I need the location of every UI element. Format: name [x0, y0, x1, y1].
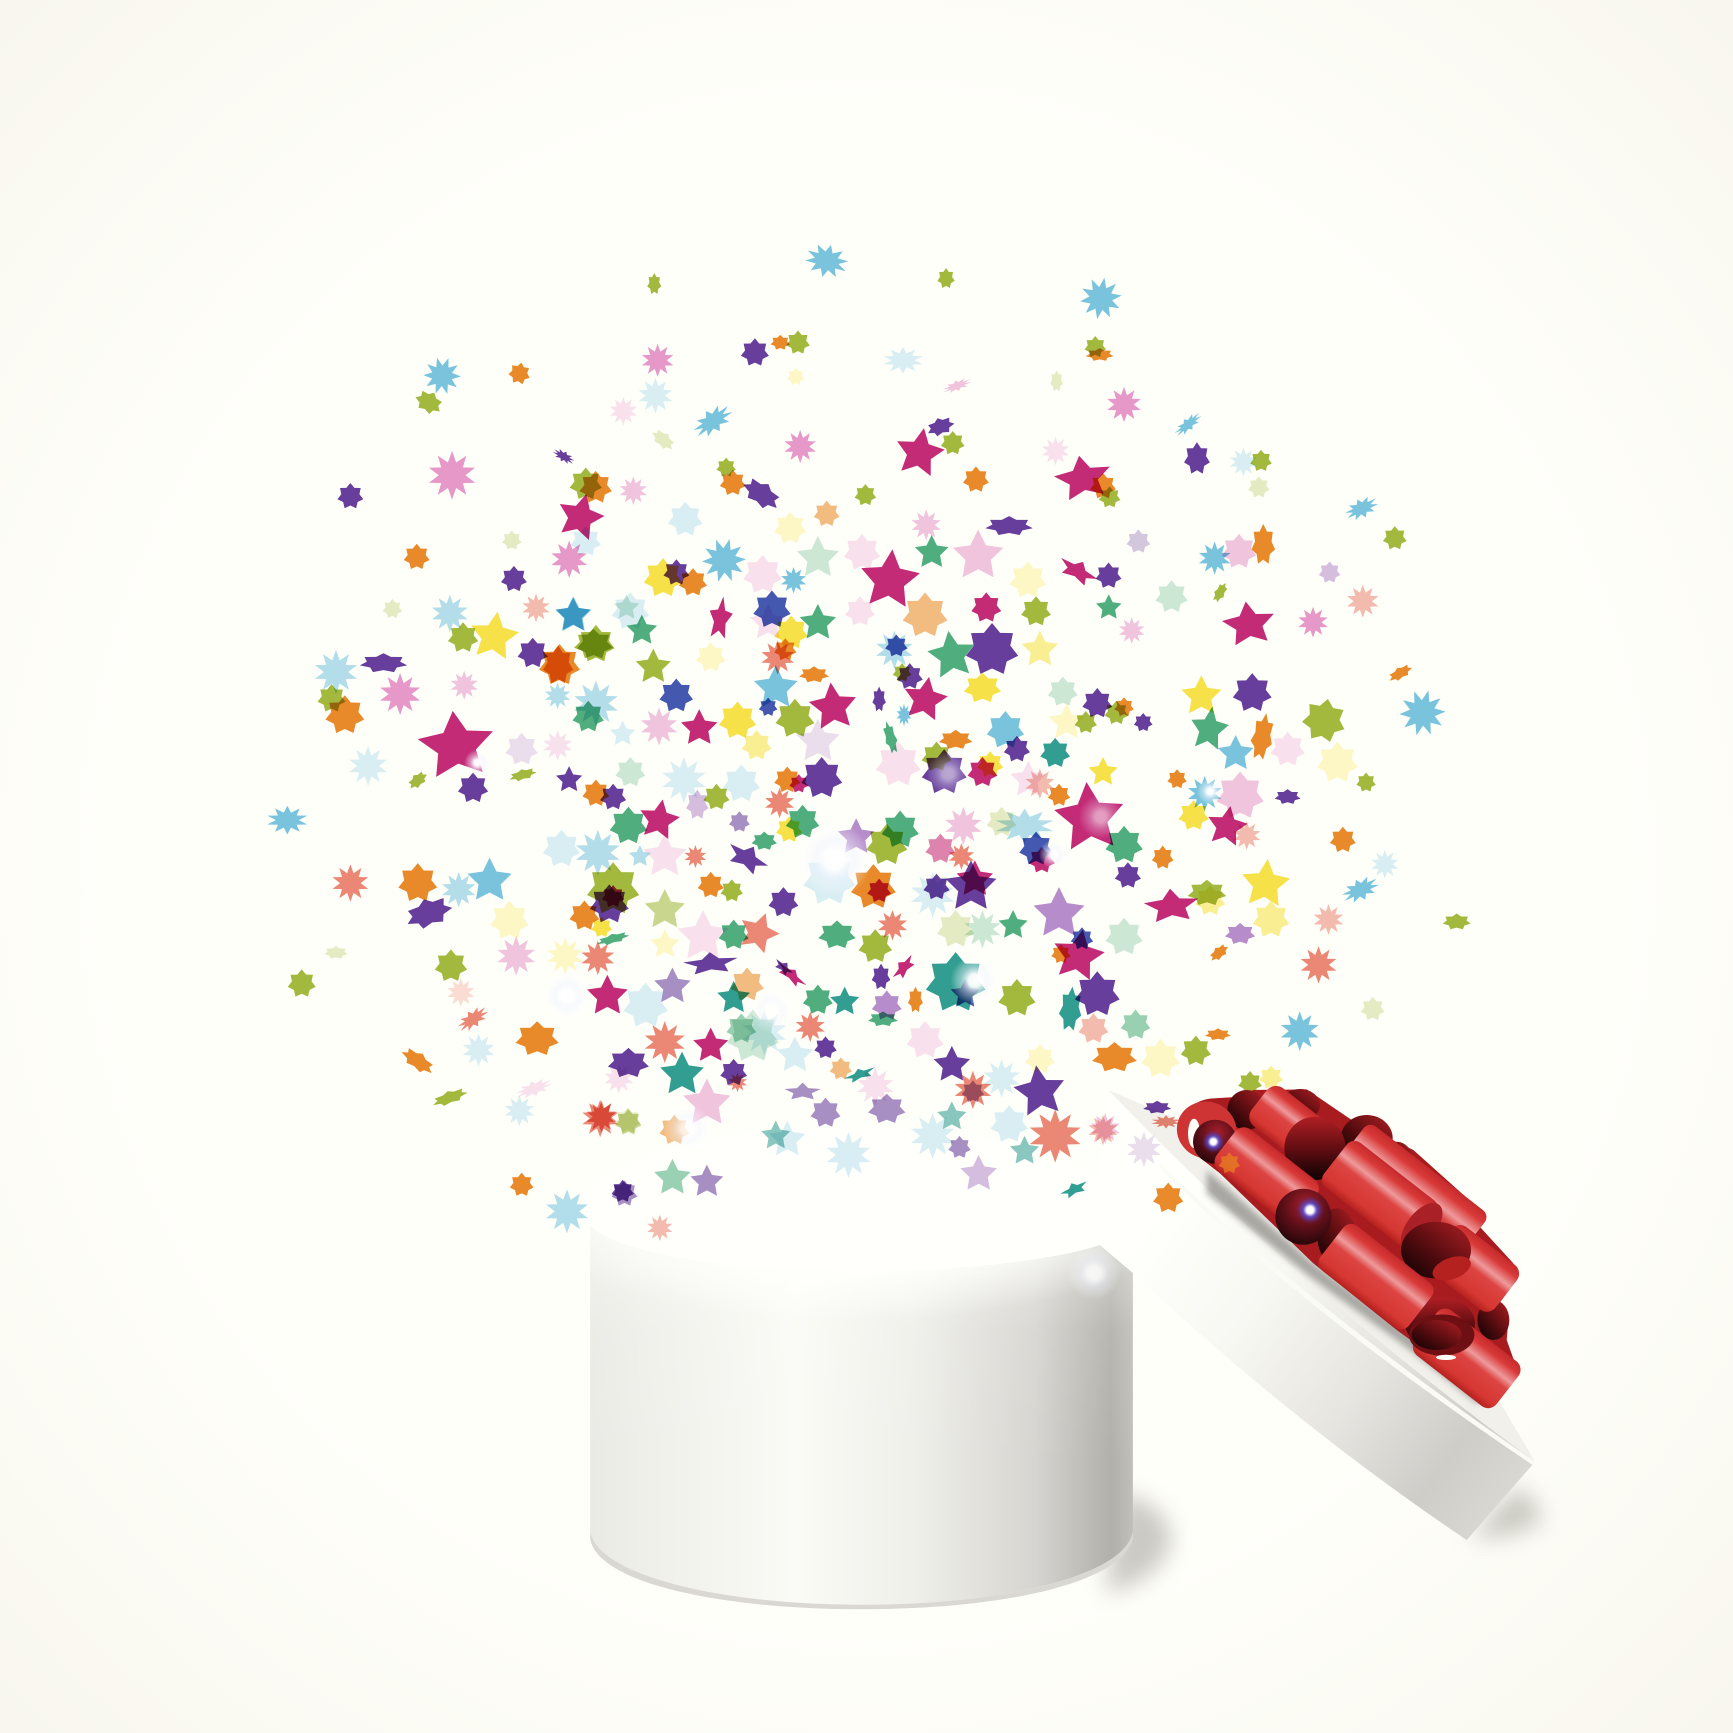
confetti: outer scattered stars: [267, 239, 1471, 1241]
gift box lid side and top: [1090, 1090, 1535, 1540]
right ribbon fold: [1423, 1220, 1524, 1316]
lower right dark loop: [1405, 1297, 1475, 1349]
centre ribbon fold: [1318, 1137, 1442, 1251]
white glow rising from the box opening: [519, 1111, 1183, 1321]
back loops of bow: [1227, 1089, 1509, 1340]
top left ring loop: [1169, 1093, 1245, 1167]
front left ribbon fold: [1210, 1123, 1323, 1227]
bottom centre ribbon fold: [1314, 1220, 1438, 1333]
shadows on the ground: [1105, 1487, 1540, 1594]
orange star on bow: [1219, 1152, 1240, 1173]
bow base silhouette: [1180, 1089, 1515, 1393]
gift box body: [590, 1216, 1133, 1609]
sparkles of light: [464, 749, 1223, 1300]
central dark loop sphere: [1275, 1189, 1356, 1265]
upper ribbon fold with open loop: [1244, 1081, 1346, 1180]
dark centre opening: [1393, 1196, 1474, 1285]
red ribbon bow: [1169, 1081, 1525, 1412]
confetti: dense centre cluster: [539, 590, 1153, 1202]
inner lower loop: [1409, 1314, 1474, 1360]
bottom ribbon fold: [1409, 1304, 1525, 1412]
